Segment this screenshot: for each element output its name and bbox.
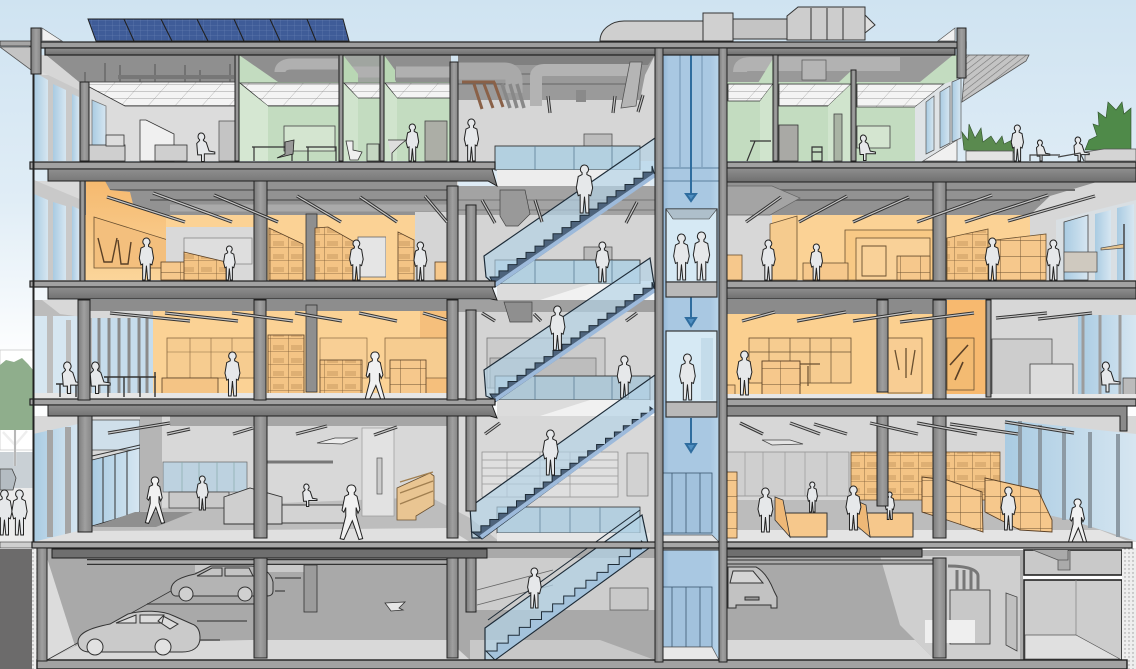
ground floor lobby — [33, 416, 655, 543]
elevator car lower — [666, 331, 717, 417]
right roof overhang — [962, 55, 1029, 102]
floor 3 left: office glazing and grey office — [33, 55, 238, 161]
floor 2 right: shop — [727, 181, 1136, 281]
seated office worker — [197, 133, 215, 162]
street trees and sidewalk — [0, 350, 37, 669]
atrium lower level — [458, 300, 655, 416]
store people — [758, 482, 1087, 543]
stairs, basement to ground — [485, 510, 649, 660]
standing worker, green office — [406, 124, 419, 161]
person at atrium level 2 — [596, 242, 609, 282]
stairs, ground to floor 1 — [470, 375, 655, 539]
rooftop HVAC equipment — [600, 7, 875, 41]
terrace planters and plants — [962, 102, 1136, 161]
person on stairs, floor 2 — [576, 165, 593, 213]
atrium middle level — [458, 186, 655, 300]
elevator car upper — [666, 209, 717, 297]
person at atrium level 1 — [617, 356, 632, 398]
floor 1 left: orange shop and cafe — [33, 300, 458, 400]
ceiling light fixtures — [107, 95, 1095, 435]
floor 3 right: green offices — [727, 55, 961, 161]
car, front view — [728, 567, 777, 608]
cafe guests and shoppers, floor 1 left — [62, 352, 386, 403]
person by atrium railing — [464, 119, 479, 161]
elevator direction arrows — [686, 55, 696, 452]
shop people, floor 2 right — [762, 238, 1060, 280]
person on terrace — [1011, 125, 1023, 161]
seated people, right offices and terrace — [859, 135, 1089, 161]
car, parked rear — [171, 566, 273, 601]
floor 2 left: orange shop — [33, 180, 458, 281]
stairs, floor 1 to floor 2 — [484, 258, 655, 402]
atrium upper level — [458, 55, 655, 186]
basement parking left — [37, 548, 655, 662]
ground floor right: store — [727, 416, 1136, 542]
shop customers, floor 2 left — [139, 238, 427, 280]
pedestrians outside entrance — [0, 490, 27, 535]
person on basement stairs — [528, 568, 541, 608]
person on stairs, floor 1 — [550, 306, 565, 350]
floor 3: green offices — [239, 55, 451, 161]
elevator shaft — [660, 48, 722, 662]
basement right: parking and plant rooms — [727, 548, 1136, 669]
car, parked front — [78, 611, 200, 655]
person on stairs, ground level — [543, 430, 558, 475]
shop person and seated person, floor 1 right — [737, 351, 1120, 395]
stairs, floor 2 to floor 3 — [484, 138, 655, 287]
floor 1 right: clothing shop — [727, 300, 1136, 399]
lobby people — [145, 476, 363, 540]
solar panels — [88, 19, 349, 41]
